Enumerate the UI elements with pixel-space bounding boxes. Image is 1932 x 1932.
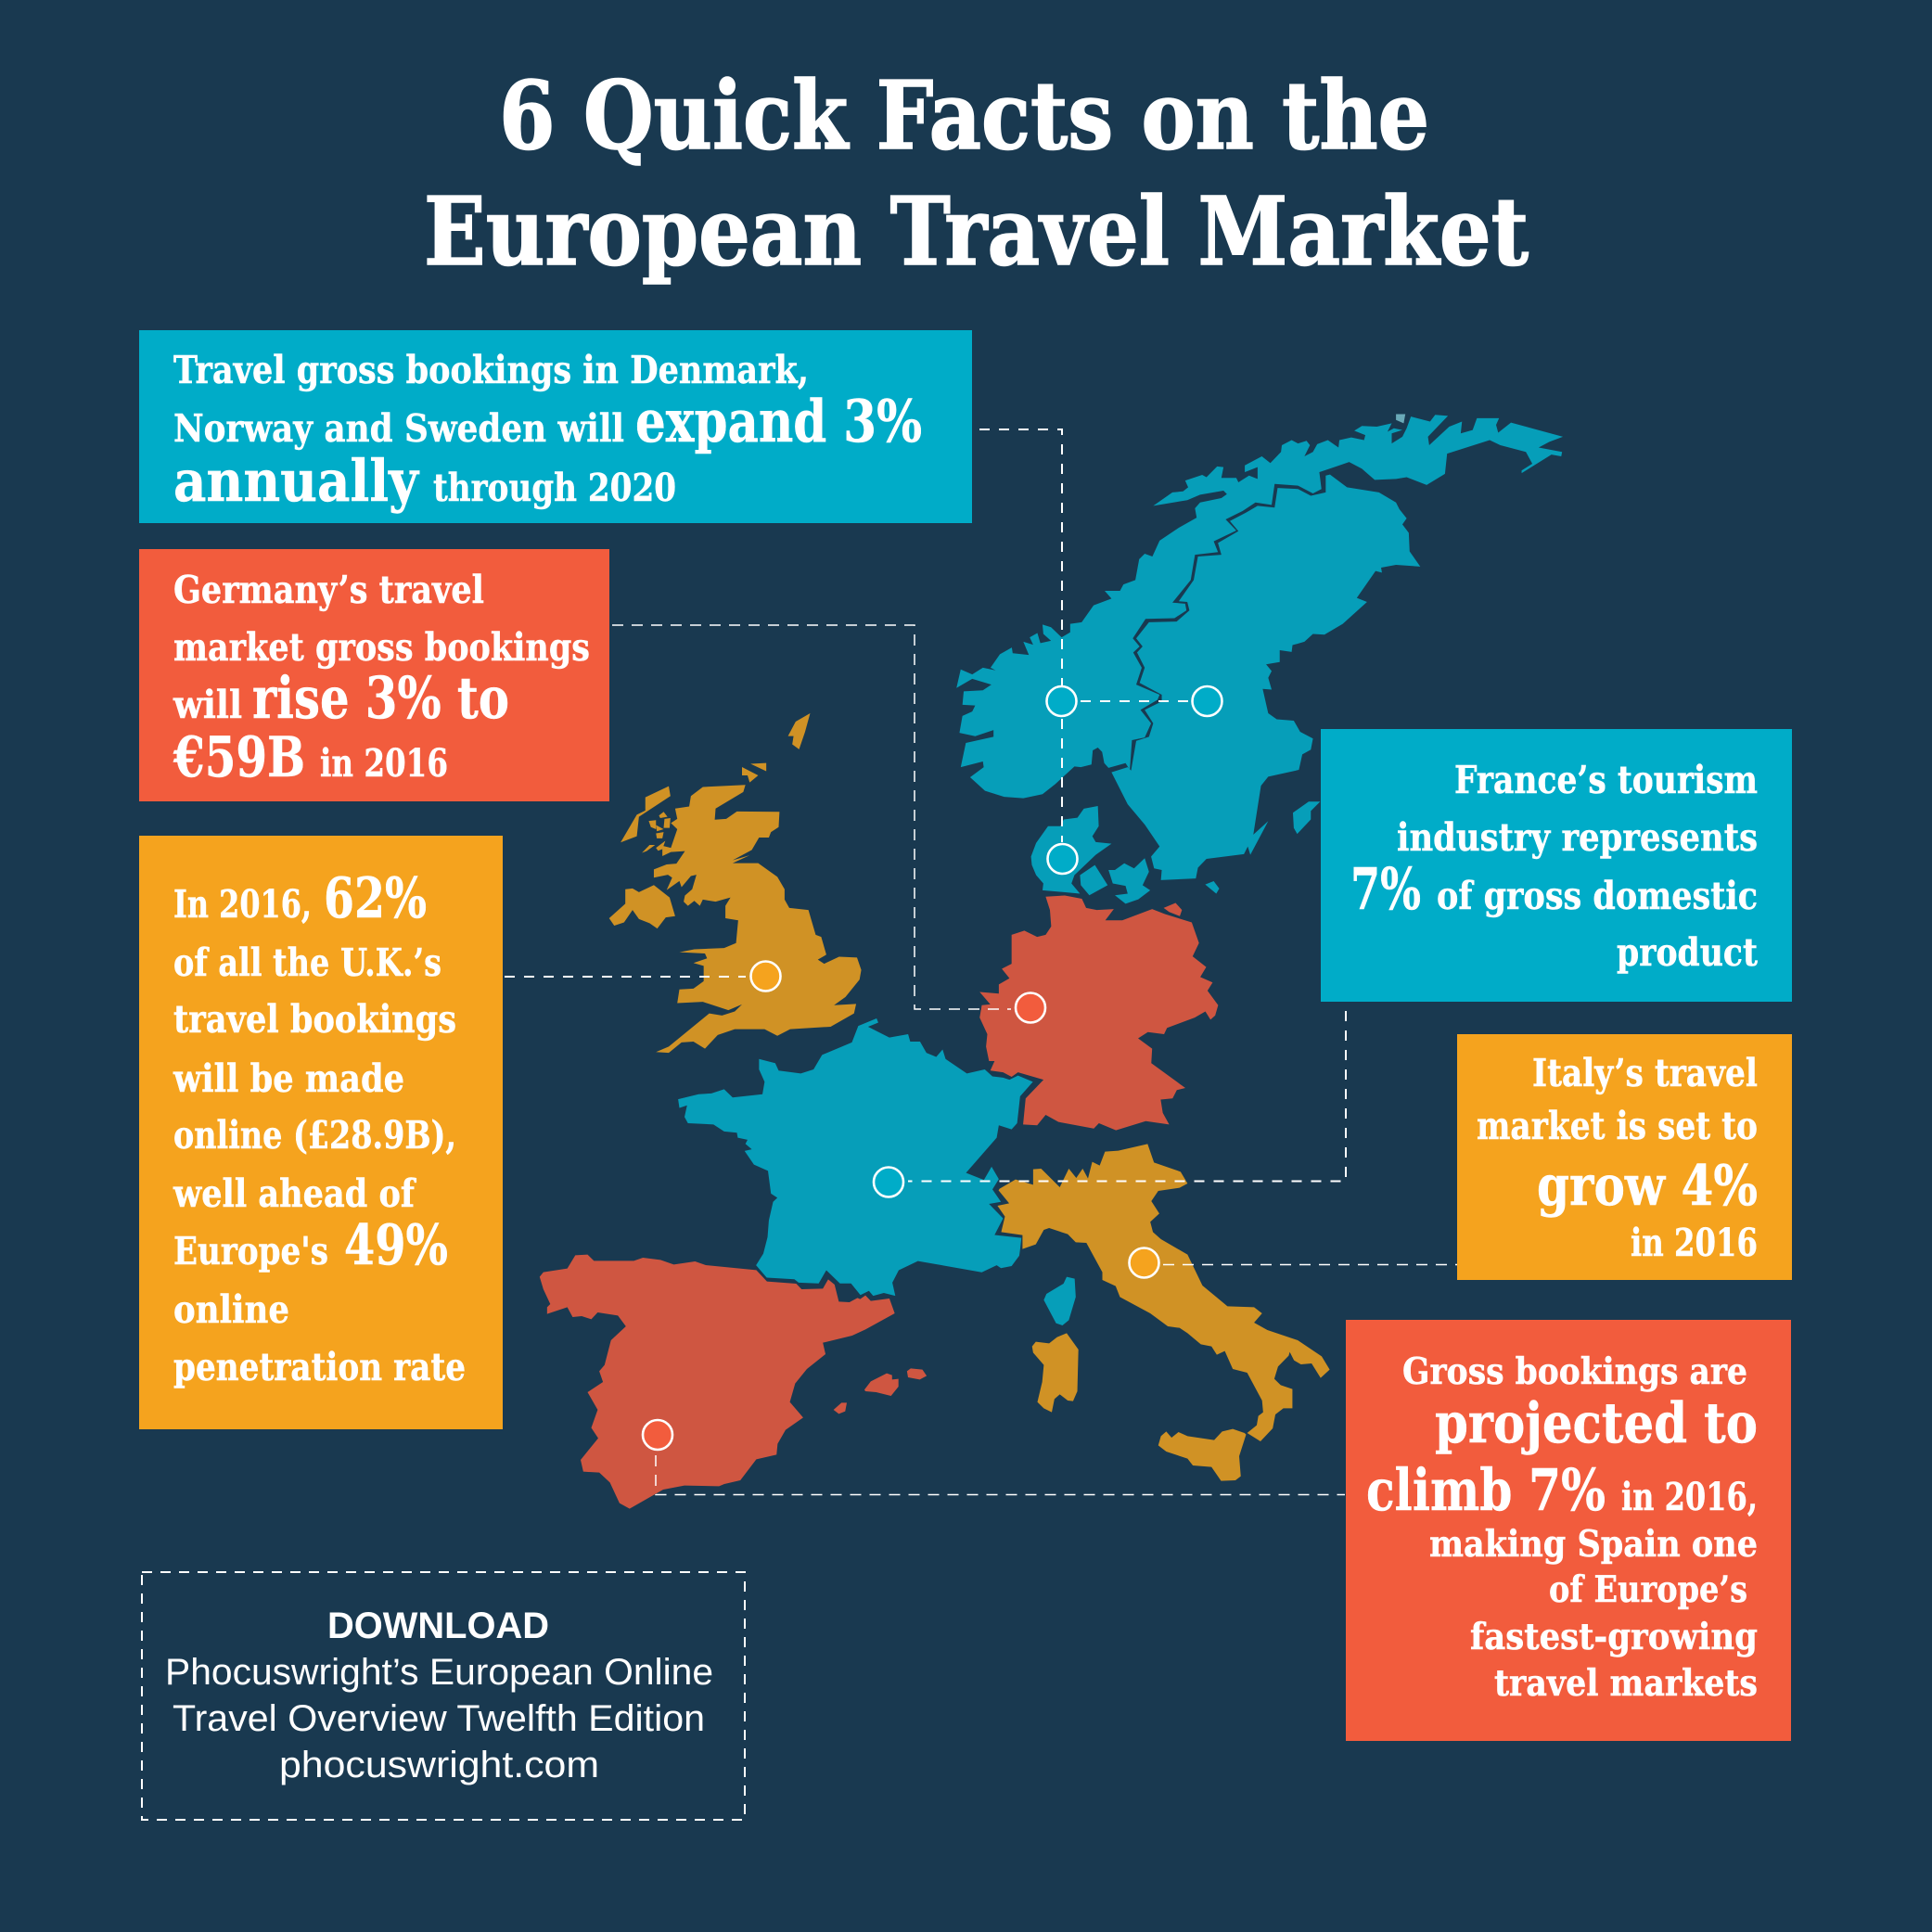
panel: United Kingdom fact: of all the U.K.’s <box>173 940 441 985</box>
connector: Spain box to Spain pin <box>656 1455 1345 1495</box>
panel: Germany fact: Germany’s travel <box>173 568 484 612</box>
panel: Spain fact: making Spain one <box>1429 1523 1758 1566</box>
panel: Scandinavia fact: annually <box>173 447 420 515</box>
connector: Germany box to Germany pin <box>612 625 1011 1009</box>
map: Norway, Sweden and Denmark <box>956 415 1563 903</box>
panel: Italy fact <box>1457 1034 1792 1280</box>
pin: United Kingdom <box>751 961 781 991</box>
panel: Italy fact: Italy’s travel <box>1532 1051 1758 1095</box>
panel: Italy fact: grow 4% <box>1537 1154 1758 1219</box>
panel: Scandinavia fact: expand 3% <box>635 387 922 455</box>
map: Italy <box>997 1144 1330 1481</box>
panel: Spain fact: projected to <box>1435 1391 1758 1456</box>
panel: Spain fact: fastest-growing <box>1470 1616 1758 1658</box>
pin: France <box>874 1167 903 1196</box>
map: United Kingdom <box>609 713 862 1053</box>
connector: France box to France pin <box>908 1011 1346 1182</box>
panel: France fact <box>1321 729 1792 1002</box>
panel: Scandinavia fact: Travel gross bookings in Denmark, <box>173 348 809 392</box>
panel: Germany fact: in 2016 <box>320 741 448 786</box>
panel: download callout: DOWNLOAD <box>327 1606 549 1646</box>
map: Corsica <box>1043 1277 1076 1325</box>
map: Spain <box>540 1255 927 1509</box>
panel: United Kingdom fact: online (£28.9B), <box>173 1113 456 1158</box>
panel: United Kingdom fact: Europe's <box>173 1229 328 1273</box>
panel: United Kingdom fact: penetration rate <box>173 1345 466 1389</box>
panel: United Kingdom fact: In 2016, <box>173 882 312 927</box>
title <box>424 60 1529 287</box>
panel: Italy fact: market is set to <box>1477 1104 1758 1148</box>
pin: Germany <box>1016 992 1045 1022</box>
panel: download callout: Phocuswright’s European Online <box>165 1652 713 1693</box>
pin: Denmark <box>1048 844 1078 874</box>
panel: Germany fact: market gross bookings <box>173 625 590 670</box>
pin: Italy <box>1130 1248 1159 1278</box>
panel: Germany fact <box>139 549 609 801</box>
map: Germany <box>979 895 1218 1131</box>
panel: United Kingdom fact: 49% <box>344 1213 448 1278</box>
panel: United Kingdom fact <box>139 836 503 1429</box>
title: European Travel Market <box>424 176 1529 287</box>
panel: Spain fact: travel markets <box>1494 1662 1758 1705</box>
panel: download callout: Travel Overview Twelfth Edition <box>173 1698 705 1739</box>
panel: Spain fact: of Europe’s <box>1549 1568 1747 1611</box>
panel: United Kingdom fact: will be made <box>173 1056 404 1101</box>
panel: Germany fact: will <box>173 683 242 727</box>
panel: United Kingdom fact: 62% <box>324 866 427 931</box>
panel: Spain fact: climb 7% <box>1366 1456 1606 1524</box>
panel: download callout <box>142 1572 745 1820</box>
panel: Scandinavia fact: through 2020 <box>433 466 676 510</box>
panel: Germany fact: €59B <box>173 725 305 790</box>
panel: France fact: product <box>1617 930 1758 975</box>
connector: U.K. box to U.K. pin <box>505 976 746 978</box>
panel: France fact: France’s tourism <box>1454 758 1758 802</box>
panel: United Kingdom fact: online <box>173 1287 289 1332</box>
pin: Norway <box>1046 686 1076 716</box>
connector: Scandinavia box to Norway and Denmark pins <box>979 429 1189 842</box>
panel: Scandinavia fact: Norway and Sweden will <box>173 406 624 451</box>
panel: Spain fact: in 2016, <box>1621 1475 1758 1519</box>
panel: Spain fact: Gross bookings are <box>1402 1350 1747 1393</box>
pin: Sweden <box>1193 686 1222 716</box>
pin: Spain <box>643 1420 672 1450</box>
panel: Scandinavia fact <box>139 330 972 523</box>
panel: France fact: 7% <box>1350 855 1421 923</box>
panel: Italy fact: in 2016 <box>1631 1221 1758 1265</box>
panel: France fact: industry represents <box>1397 815 1758 860</box>
panel: download callout: phocuswright.com <box>279 1745 599 1785</box>
panel: Spain fact <box>1346 1320 1791 1741</box>
panel: United Kingdom fact: well ahead of <box>173 1171 416 1216</box>
title: 6 Quick Facts on the <box>499 60 1429 171</box>
panel: United Kingdom fact: travel bookings <box>173 997 456 1042</box>
map: France <box>678 1018 1033 1296</box>
connector: Italy box to Italy pin <box>1163 1263 1457 1265</box>
map of Europe <box>540 415 1563 1509</box>
panel: France fact: of gross domestic <box>1437 874 1758 918</box>
panel: Germany fact: rise 3% to <box>252 664 509 732</box>
